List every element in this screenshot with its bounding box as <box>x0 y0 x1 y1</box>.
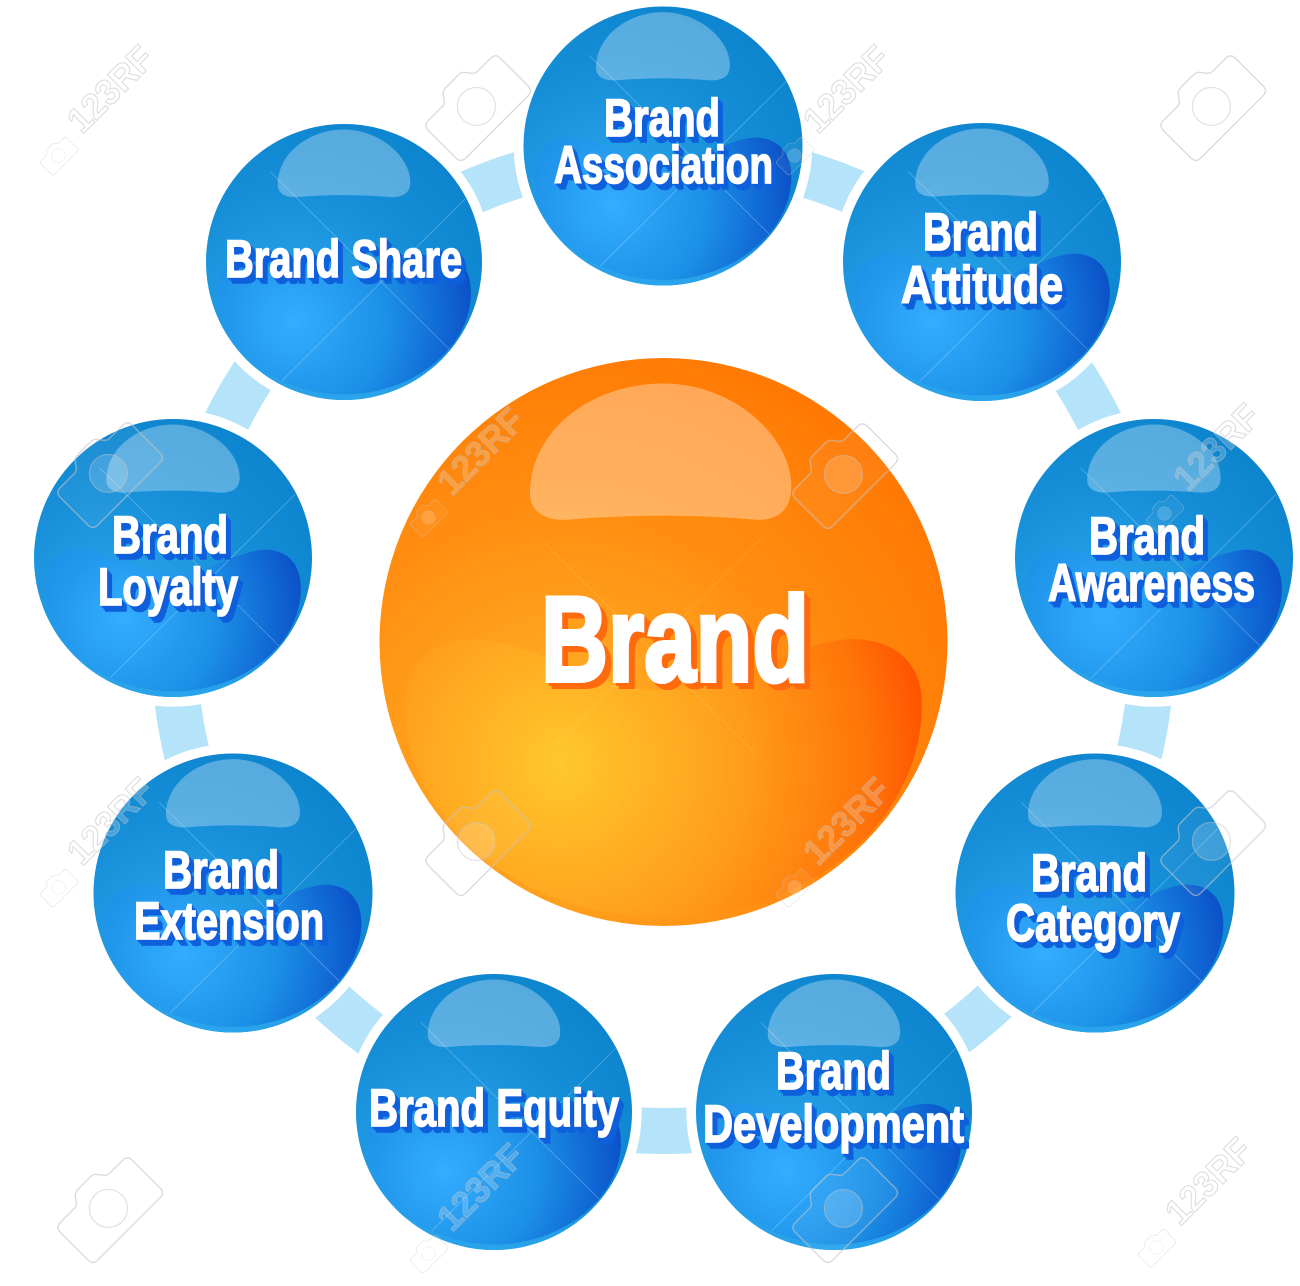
sphere: Brand Share <box>196 114 492 410</box>
sphere: Brand Share: Brand Share <box>225 230 462 289</box>
sphere: Brand Loyalty: Loyalty <box>98 558 238 617</box>
sphere: Brand Attitude: Brand <box>923 203 1038 262</box>
sphere: Brand Extension: Extension <box>134 892 324 951</box>
center sphere: Brand <box>380 358 948 926</box>
sphere: Brand Association: Brand <box>604 89 720 148</box>
sphere: Brand Equity: Brand Equity <box>369 1079 619 1138</box>
sphere: Brand Awareness <box>1005 409 1300 707</box>
sphere: Brand Equity <box>346 964 642 1260</box>
center sphere: Brand: Brand <box>541 571 809 707</box>
sphere: Brand Loyalty <box>24 409 322 707</box>
sphere: Brand Association: Association <box>554 136 773 195</box>
sphere: Brand Association <box>514 0 812 295</box>
sphere: Brand Category: Brand <box>1031 844 1147 903</box>
sphere: Brand Extension: Brand <box>163 841 279 900</box>
sphere: Brand Extension <box>84 744 382 1042</box>
sphere: Brand Attitude <box>833 113 1131 411</box>
sphere: Brand Development: Brand <box>776 1042 891 1101</box>
sphere: Brand Category: Category <box>1006 894 1180 953</box>
sphere: Brand Loyalty: Brand <box>112 506 228 565</box>
sphere: Brand Attitude: Attitude <box>901 256 1063 315</box>
sphere: Brand Awareness: Brand <box>1089 507 1205 566</box>
connector ring <box>174 153 1152 1131</box>
sphere: Brand Development <box>686 964 982 1260</box>
sphere: Brand Category <box>946 744 1244 1042</box>
sphere: Brand Development: Development <box>703 1095 964 1154</box>
